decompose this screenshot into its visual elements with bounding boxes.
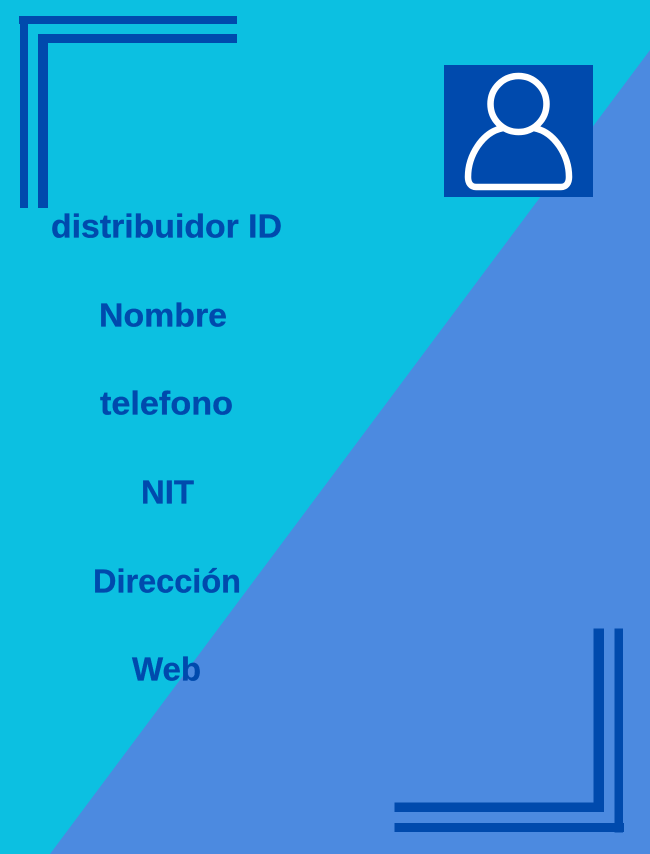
label: NIT: NIT: [141, 474, 194, 510]
label: telefono: telefono: [100, 384, 233, 422]
bottom-right corner frame: [394, 628, 624, 832]
label: distribuidor ID: distribuidor ID: [51, 208, 282, 244]
icon: person profile: [444, 65, 593, 197]
label: Nombre: Nombre: [99, 296, 227, 334]
top-left corner frame: [19, 16, 237, 208]
field labels: [51, 208, 282, 688]
label: Dirección: Dirección: [93, 562, 241, 600]
label: Web: Web: [132, 650, 201, 688]
